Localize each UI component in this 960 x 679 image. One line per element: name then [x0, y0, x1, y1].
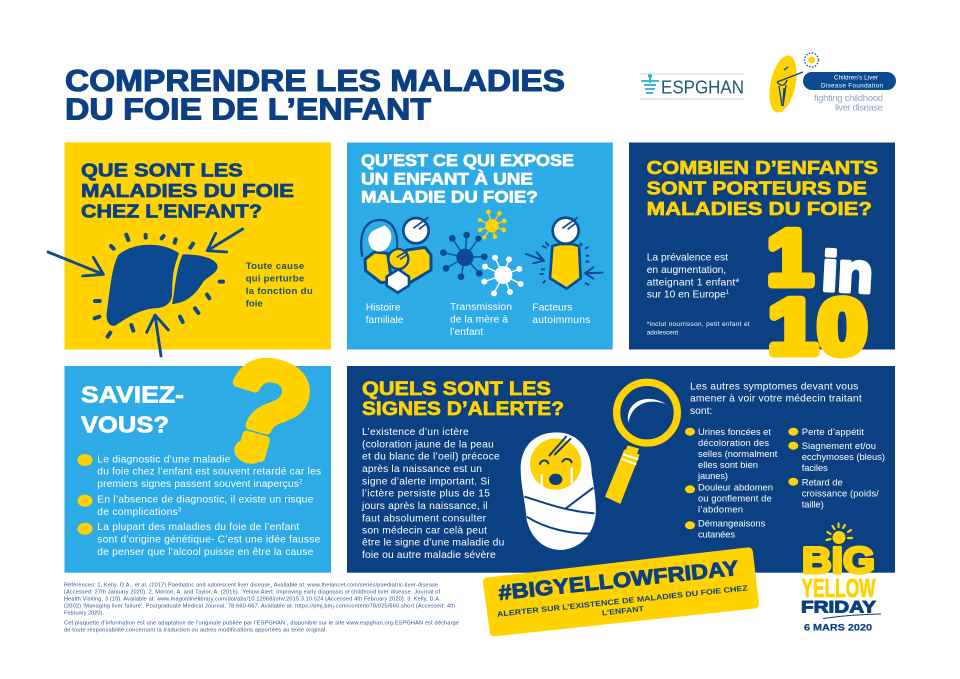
icon: question mark: ? [206, 326, 326, 495]
list: symptomes column 1: Douleur abdomen [698, 481, 773, 492]
logo sun [826, 524, 852, 544]
heading: qu'est ce qui expose: QU’EST CE QUI EXPOSE [361, 152, 574, 170]
text: references: (Accessed: 27th January 2020). 2. Morton, A. and Taylor, A. (2015). ‘Yellow Alert: Improving early diagnosis of childhood liver disease. Journal of [64, 590, 440, 596]
text: disclaimer: de toute responsabilité concernant la traduction ou autres modifications apportées au texte original. [64, 628, 327, 634]
icon: viruses [441, 210, 523, 296]
text: ictère: son médecin car celà peut [362, 525, 487, 536]
text: autres symptomes intro [690, 381, 862, 417]
heading: quels sont les signes: SIGNES D’ALERTE? [362, 399, 564, 420]
text: disclaimer: Cet plaquette d’information est une adaptation de l’originale publiée par l’ESPGHAN , disponible sur le site www.espghan.org.ESPGHAN est déchargé [64, 620, 459, 626]
title: COMPRENDRE LES MALADIES [65, 63, 565, 98]
labels: risk factors: familiale [366, 315, 404, 326]
list: symptomes column 1: Urines foncées et [698, 426, 771, 437]
text: ictère: foie ou autre maladie sévère [362, 550, 496, 561]
text: saviez-vous facts: En l’absence de diagnostic, il existe un risque [97, 495, 314, 506]
list: symptomes column 2: ecchymoses (bleus) [802, 451, 885, 462]
logo wordmark [801, 540, 877, 616]
list: symptomes column 1: ou gonflement de [698, 492, 772, 503]
text: ictère [361, 427, 505, 561]
text: toute cause: qui perturbe [246, 274, 304, 285]
statistic: 1 in 10: in [820, 239, 875, 305]
icon: swaddled baby [521, 432, 596, 550]
text: disclaimer [64, 620, 459, 634]
heading: que sont les maladies: MALADIES DU FOIE [81, 180, 294, 201]
statistic: 1 in 10: 1 [767, 214, 813, 302]
heading: combien d'enfants: SONT PORTEURS DE [647, 178, 867, 198]
list: symptomes column 1: jaunes) [697, 470, 728, 481]
text: ictère: après la naissance est un [362, 464, 482, 475]
list: symptomes column 1: selles (normalment [698, 448, 778, 459]
note: inclut nourrisson [647, 321, 750, 336]
labels: risk factors: Transmission [450, 302, 512, 313]
logo: Children's Liver Disease Foundation: Disease Foundation [821, 82, 883, 89]
bullets: saviez-vous [78, 454, 92, 535]
list: symptomes column 1: décoloration des [698, 437, 769, 448]
text: ictère: L’existence d’un ictère [362, 427, 469, 438]
text: references: February 2020). [64, 610, 104, 616]
bullets: symptomes [685, 428, 798, 529]
text: saviez-vous facts: premiers signes passent souvent inaperçus [97, 479, 299, 490]
list: symptomes column 1: elles sont bien [698, 459, 758, 470]
logo wordmark: BIG [802, 540, 875, 581]
text: references [64, 583, 455, 616]
text: autres symptomes intro: amener à voir votre médecin traitant [690, 394, 862, 405]
list: symptomes column 1: cutanées [698, 529, 735, 540]
text: saviez-vous facts: de penser que l’alcool puisse en être la cause [97, 547, 314, 558]
heading: qu'est ce qui expose: UN ENFANT À UNE [361, 169, 533, 188]
banner subheading: L’ENFANT [602, 604, 645, 617]
list: symptomes column 2: Retard de [802, 476, 843, 487]
heading: que sont les maladies: CHEZ L’ENFANT? [81, 200, 262, 221]
text: saviez-vous facts: 3 [178, 508, 182, 514]
text: prévalence: en augmentation, [647, 265, 726, 276]
note: inclut nourrisson: *inclut nourrisson, petit enfant et [647, 321, 750, 328]
heading: quels sont les signes: QUELS SONT LES [362, 379, 551, 400]
panel: combien d'enfants [629, 142, 895, 370]
text: ictère: signe d’alerte important. Si [362, 476, 490, 487]
text: autres symptomes intro: sont: [690, 406, 712, 417]
text: ictère: (coloration jaune de la peau [362, 439, 494, 450]
logo wordmark: YELLOW [802, 573, 876, 603]
banner headline: #BIGYELLOWFRIDAY [497, 557, 740, 605]
heading: que sont les maladies [81, 160, 294, 221]
list: symptomes column 2: Perte d’appétit [802, 426, 864, 437]
logo: ESPGHAN [640, 74, 744, 99]
list: symptomes column 2: Siagnement et/ou [802, 440, 876, 451]
list: symptomes column 1: Démangeaisons [698, 518, 766, 529]
note: inclut nourrisson: adolescent [647, 329, 678, 336]
logo: ESPGHAN: ESPGHAN [661, 77, 744, 97]
text: autres symptomes intro: Les autres symptomes devant vous [690, 381, 858, 392]
panel: saviez-vous [64, 326, 331, 573]
panel: facteurs de risque [347, 142, 613, 350]
text: ictère: faut absolument consulter [362, 513, 487, 524]
statistic: 1 in 10: 10 [768, 282, 867, 370]
text: references: Références: 1. Kelly, D.A., et al. (2017) Paediatric and adolescent liver disease, Available at: www.thelancet.com/series/paediatric-liver-disease [64, 583, 438, 589]
text: toute cause: foie [246, 298, 263, 310]
text: saviez-vous facts [97, 454, 321, 558]
icon: liver with arrows [48, 229, 243, 356]
list: symptomes column 2: croissance (poids/ [802, 487, 879, 498]
text: ictère: et du blanc de l’oeil) précoce [362, 452, 500, 463]
heading: combien d'enfants: MALADIES DU FOIE? [647, 198, 872, 219]
text: saviez-vous facts: 2 [299, 480, 303, 486]
banner subheading: ALERTER SUR L’EXISTENCE DE MALADIES DU FOIE CHEZ [497, 583, 749, 619]
heading: combien d'enfants [647, 157, 878, 219]
text: toute cause: Toute cause [246, 261, 304, 272]
logo wordmark: FRIDAY [801, 598, 877, 616]
list: symptomes column 2: faciles [802, 462, 828, 473]
text: saviez-vous facts: Le diagnostic d’une maladie [97, 454, 231, 465]
icon: autoimmune person [526, 217, 602, 289]
heading: quels sont les signes [362, 379, 564, 420]
text: prévalence [647, 253, 739, 301]
heading: que sont les maladies: QUE SONT LES [81, 160, 243, 181]
labels: risk factors: autoimmuns [532, 315, 590, 326]
heading: saviez-vous: VOUS? [81, 411, 169, 437]
text: toute cause: la fonction du [246, 286, 313, 297]
text: saviez-vous facts: de complications [97, 507, 178, 518]
panel: signes d'alerte [347, 366, 895, 573]
text: references: (2002) ‘Managing liver failure’, Postgraduate Medical Journal, 78:660-667. Available at: https://pmj.bmj.com/content/78/925/660.short (Accessed: 4th [64, 603, 455, 609]
text: prévalence: La prévalence est [647, 253, 728, 264]
statistic: 1 in 10 [767, 214, 875, 370]
heading: saviez-vous [81, 382, 184, 437]
labels: risk factors [366, 302, 590, 338]
text: prévalence: sur 10 en Europe [647, 290, 726, 301]
banner: #bigyellowfriday [483, 547, 759, 636]
icon: magnifying glass [605, 382, 677, 504]
panel: que sont les maladies [48, 142, 331, 356]
list: symptomes column 2 [802, 426, 885, 509]
logo: Children's Liver Disease Foundation [765, 53, 896, 115]
heading: saviez-vous: SAVIEZ- [81, 382, 184, 408]
text: saviez-vous facts: du foie chez l’enfant est souvent retardé car les [97, 467, 321, 478]
text: prévalence: atteignant 1 enfant* [647, 277, 739, 288]
title: DU FOIE DE L’ENFANT [65, 92, 431, 126]
text: references: Health Visiting, 3 (10). Available at: www.magonlinelibrary.com/doi/abs/10.12968/johv.2015.3.10.524 (Accessed 4th February 2020). 3. Kelly, D.A. [64, 596, 441, 602]
list: symptomes column 1 [697, 426, 778, 540]
date: 6 MARS 2020 [804, 623, 872, 633]
labels: risk factors: Facteurs [532, 303, 572, 314]
logo: Children's Liver Disease Foundation: liver disease [835, 103, 883, 114]
heading: qu'est ce qui expose: MALADIE DU FOIE? [361, 189, 538, 207]
text: saviez-vous facts: sont d’origine génétique- C’est une idée fausse [97, 534, 321, 545]
text: ictère: l’ictère persiste plus de 15 [362, 489, 490, 500]
text: saviez-vous facts: La plupart des maladies du foie de l’enfant [97, 522, 299, 533]
icon: family [361, 217, 431, 293]
text: ictère: être le signe d’une maladie du [362, 538, 505, 549]
text: prévalence: 1 [726, 290, 730, 296]
list: symptomes column 1: l’abdomen [698, 503, 743, 514]
text: toute cause [246, 261, 313, 310]
labels: risk factors: l’enfant [450, 327, 483, 338]
labels: risk factors: Histoire [366, 303, 401, 314]
list: symptomes column 2: taille) [802, 498, 824, 509]
logo: big yellow friday [801, 524, 881, 633]
heading: qu'est ce qui expose [361, 152, 574, 207]
heading: combien d'enfants: COMBIEN D’ENFANTS [647, 157, 878, 178]
title [65, 63, 565, 126]
logo: Children's Liver Disease Foundation: fighting childhood [814, 93, 883, 104]
text: ictère: jours après la naissance, il [361, 501, 488, 512]
logo: Children's Liver Disease Foundation: Children’s Liver [834, 74, 878, 81]
labels: risk factors: de la mère à [450, 314, 508, 325]
